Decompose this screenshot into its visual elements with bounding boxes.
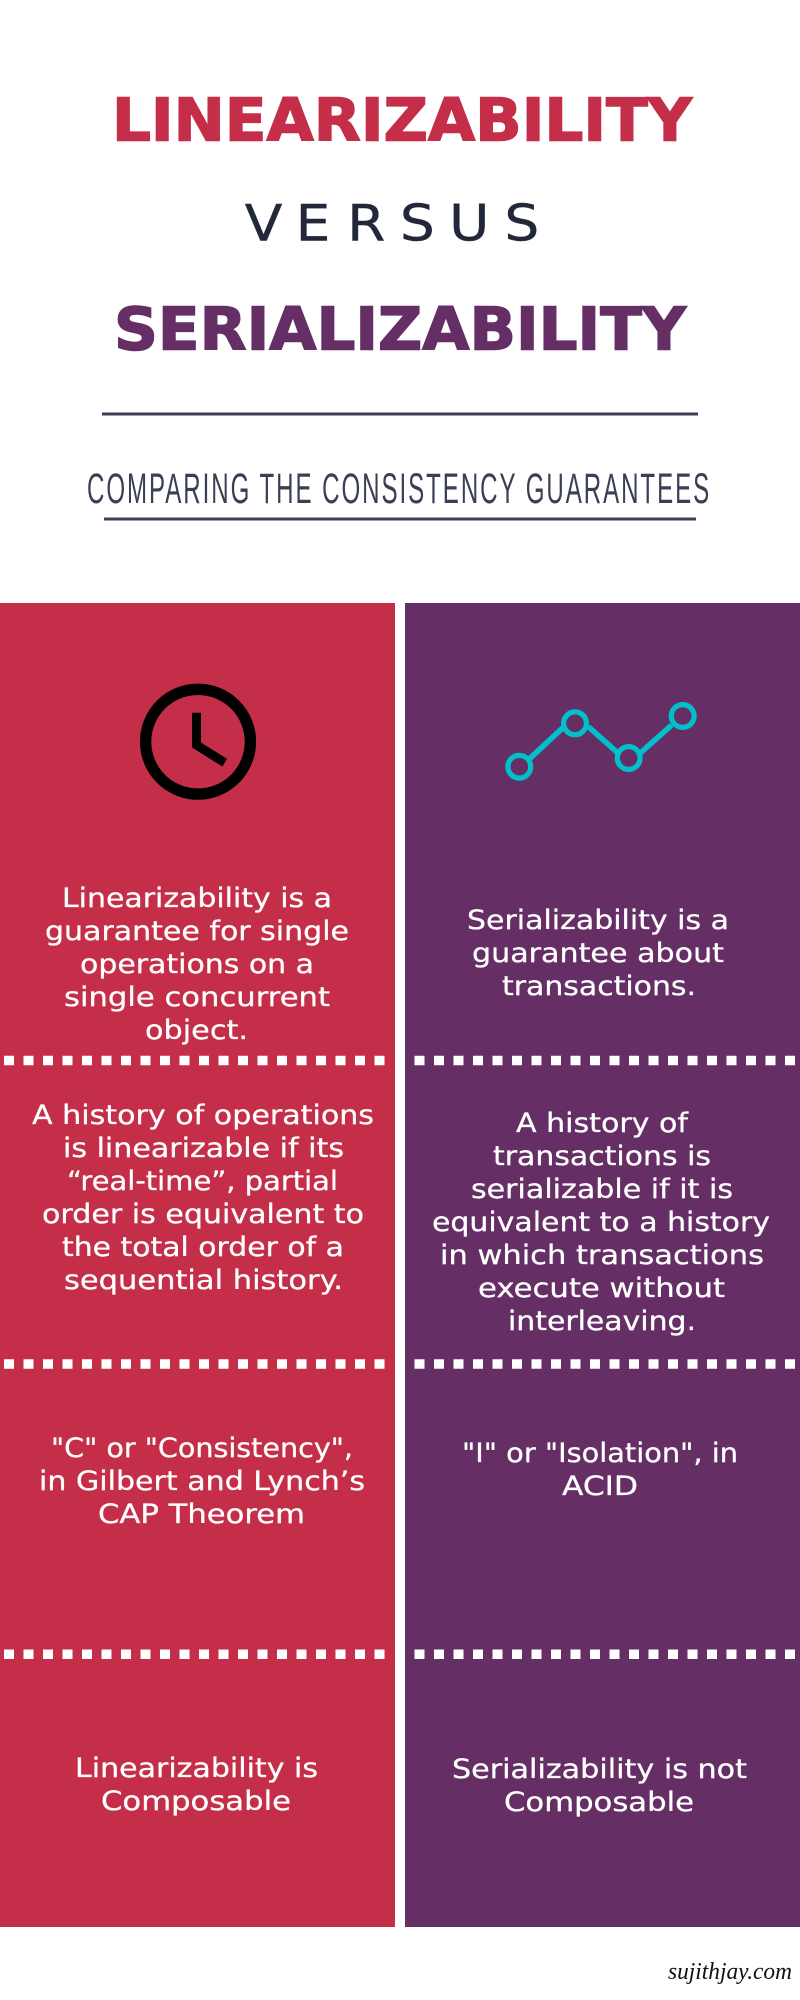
text: linearizable history: “real-time”, partial <box>67 1166 338 1197</box>
text: ACID isolation: "I" or "Isolation", in <box>462 1438 738 1469</box>
icon: line chart <box>508 705 694 778</box>
text: linearizability composable: Linearizability is <box>75 1753 318 1784</box>
text: linearizability definition: single concurrent <box>64 982 330 1013</box>
text: CAP consistency <box>39 1433 365 1530</box>
text: serializability definition: Serializability is a <box>467 905 729 936</box>
text: CAP consistency: CAP Theorem <box>98 1499 305 1530</box>
title: versus: VERSUS <box>245 195 539 253</box>
text: linearizable history: the total order of a <box>62 1232 344 1263</box>
separator: row 2 left <box>4 1359 384 1369</box>
text: ACID isolation: ACID <box>562 1471 638 1502</box>
title: Serializability: SERIALIZABILITY <box>114 294 687 363</box>
text: serializability not composable: Composable <box>504 1787 694 1818</box>
subtitle: COMPARING THE CONSISTENCY GUARANTEES <box>87 465 709 513</box>
text: serializability definition <box>467 905 729 1002</box>
text: serializability not composable <box>452 1754 747 1818</box>
text: serializable history: A history of <box>516 1108 689 1139</box>
text: serializable history: serializable if it is <box>471 1174 733 1205</box>
text: linearizable history: sequential history. <box>64 1265 343 1296</box>
footer: site credit: sujithjay.com <box>668 1959 792 1985</box>
text: serializable history <box>432 1108 770 1337</box>
divider: top rule <box>102 412 698 416</box>
text: linearizability composable: Composable <box>101 1786 291 1817</box>
separator: row 1 right <box>414 1056 795 1065</box>
text: serializability definition: transactions. <box>502 971 696 1002</box>
text: linearizability definition: object. <box>145 1015 248 1046</box>
text: linearizable history: is linearizable if its <box>63 1133 344 1164</box>
title: Linearizability: LINEARIZABILITY <box>112 85 693 154</box>
text: linearizable history <box>32 1100 374 1296</box>
text: linearizability definition: guarantee for single <box>45 916 349 947</box>
text: linearizable history: A history of operations <box>32 1100 374 1131</box>
text: serializable history: execute without <box>478 1273 725 1304</box>
text: linearizability definition: Linearizability is a <box>62 883 332 914</box>
text: serializability definition: guarantee about <box>472 938 724 969</box>
text: linearizability definition: operations on a <box>80 949 314 980</box>
separator: row 1 left <box>4 1056 384 1065</box>
text: serializability not composable: Serializability is not <box>452 1754 747 1785</box>
text: serializable history: interleaving. <box>508 1306 696 1337</box>
separator: row 3 right <box>414 1650 795 1659</box>
text: CAP consistency: "C" or "Consistency", <box>51 1433 353 1464</box>
divider: subtitle underline <box>104 518 696 520</box>
text: linearizability definition <box>45 883 349 1046</box>
panel: serializability column <box>405 603 800 1927</box>
separator: row 2 right <box>414 1359 795 1369</box>
text: linearizable history: order is equivalent to <box>42 1199 364 1230</box>
text: serializable history: in which transactions <box>440 1240 764 1271</box>
icon: clock <box>146 689 250 794</box>
text: CAP consistency: in Gilbert and Lynch’s <box>39 1466 365 1497</box>
text: ACID isolation <box>462 1438 738 1502</box>
text: linearizability composable <box>75 1753 318 1817</box>
panel: linearizability column <box>0 603 395 1927</box>
text: serializable history: equivalent to a history <box>432 1207 770 1238</box>
separator: row 3 left <box>4 1650 384 1659</box>
text: serializable history: transactions is <box>493 1141 711 1172</box>
